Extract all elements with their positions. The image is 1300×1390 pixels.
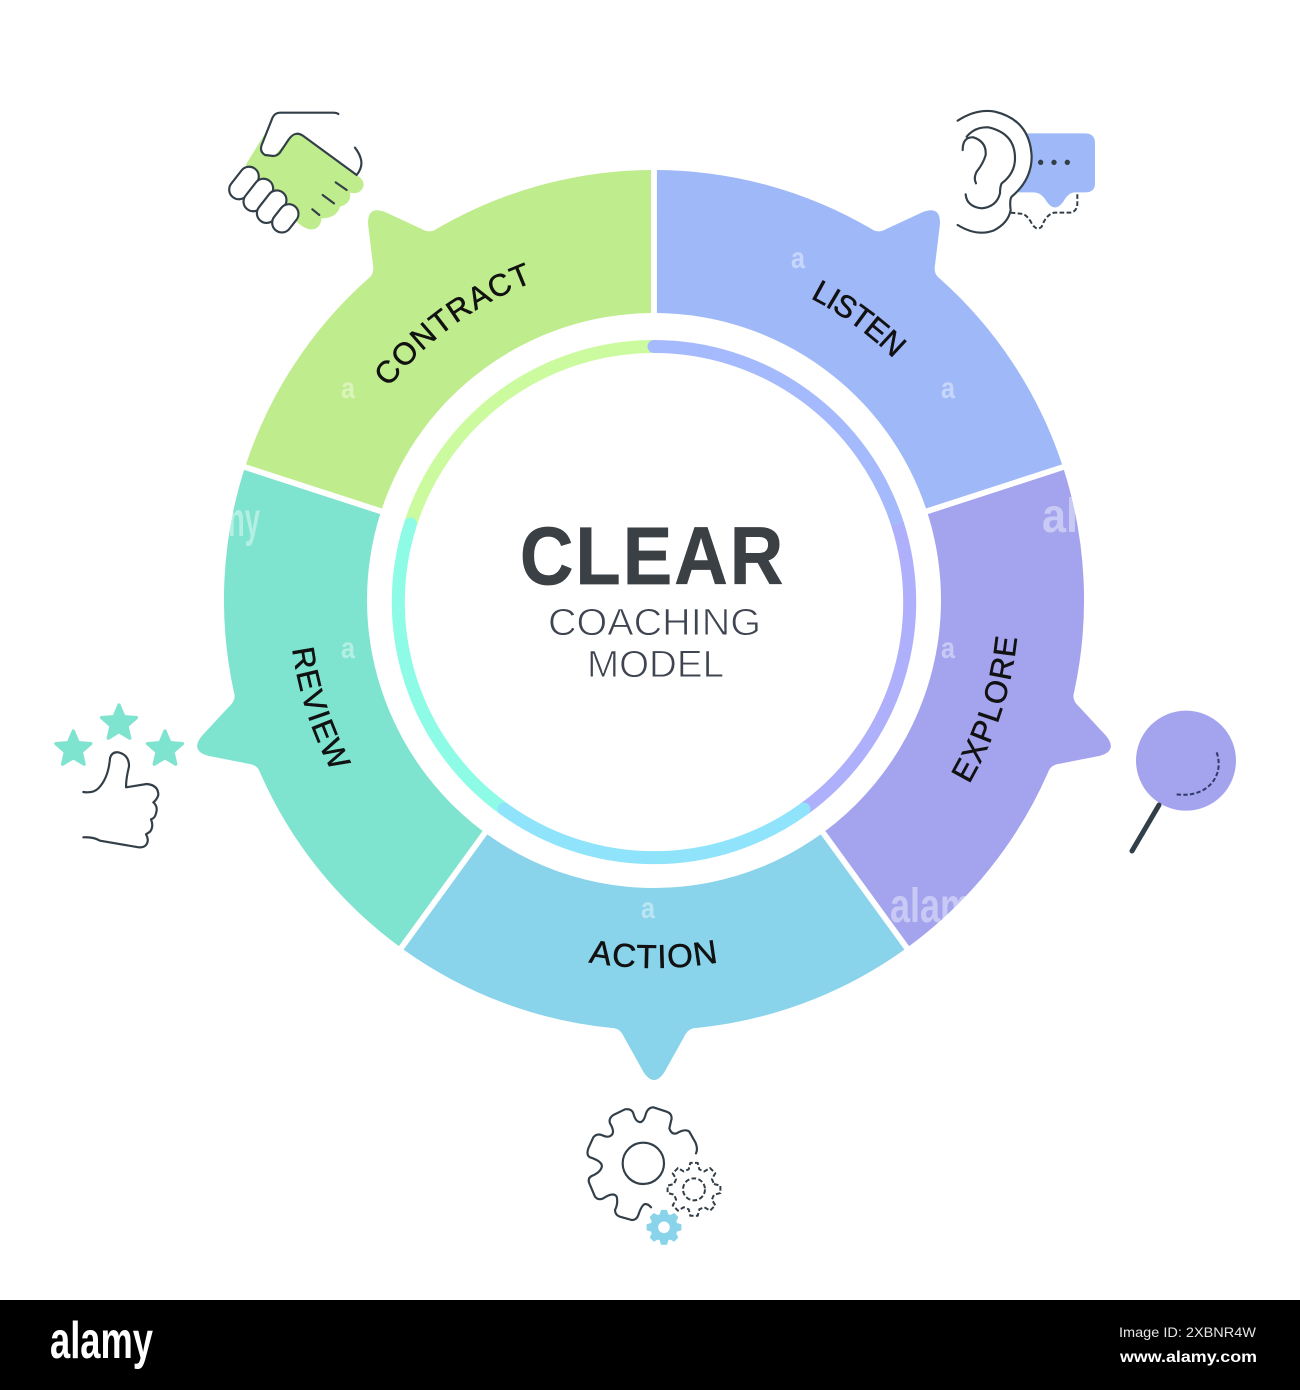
ring arc: explore: [804, 524, 910, 809]
bubble dots: [1038, 160, 1070, 165]
icon: gears: [587, 1107, 720, 1244]
large gear: [587, 1107, 697, 1220]
centre white disc: [368, 316, 940, 888]
icon: thumbs up with stars: [56, 705, 182, 847]
segment: action: [404, 834, 904, 1080]
finger creases: [312, 182, 347, 215]
image id: Image ID: 2XBNR4W: [1119, 1324, 1257, 1340]
fingers: [225, 163, 302, 236]
label: listen: LISTEN: [812, 280, 907, 358]
lens highlight: [1176, 752, 1219, 795]
label: explore: EXPLORE: [951, 636, 1018, 782]
watermark: faint alamy marks: ny: [228, 494, 260, 547]
watermark: faint alamy marks: a: [641, 892, 655, 925]
watermark: faint alamy marks: [228, 242, 1078, 933]
footer logo: alamy: [50, 1312, 153, 1370]
stars: [56, 705, 182, 764]
panel: cycle diagram: [120, 64, 1188, 1080]
footer bar: [0, 1300, 1300, 1390]
handle: [1132, 805, 1159, 851]
dashed gear: [668, 1163, 720, 1216]
icon: magnifying glass: [1132, 711, 1236, 851]
dashed bubble shadow: [1011, 193, 1077, 229]
subtitle: model: MODEL: [587, 644, 724, 686]
watermark: faint alamy marks: a: [941, 632, 955, 665]
watermark: faint alamy marks: a: [941, 372, 955, 405]
watermark: faint alamy marks: a: [791, 242, 805, 275]
label: review: REVIEW: [292, 648, 352, 766]
ear outline: [958, 111, 1032, 233]
icon: handshake: [225, 113, 364, 236]
website: www.alamy.com: [1119, 1349, 1257, 1366]
ear inner lines: [963, 127, 1015, 208]
label: action: ACTION: [588, 940, 716, 968]
segment: listen: [589, 64, 1139, 558]
icon: ear with speech bubble: [958, 111, 1095, 233]
segment: review: [120, 434, 509, 986]
subtitle: coaching: COACHING: [548, 602, 761, 644]
segment: explore: [799, 434, 1188, 986]
ring arc: contract: [410, 346, 654, 524]
large gear hub: [623, 1143, 664, 1184]
watermark: faint alamy marks: al: [1042, 490, 1078, 543]
inner progress ring: [398, 346, 910, 858]
speech bubble: [1013, 133, 1095, 207]
watermark: faint alamy marks: a: [341, 632, 355, 665]
segment: contract: [169, 64, 719, 558]
lens: [1136, 711, 1236, 811]
title: CLEAR: CLEAR: [520, 509, 785, 602]
ring arc: review: [398, 524, 504, 809]
ring arc: listen: [654, 346, 898, 524]
label: contract: CONTRACT: [376, 262, 526, 383]
watermark: faint alamy marks: a: [341, 372, 355, 405]
watermark: faint alamy marks: alam: [890, 880, 972, 933]
thumb outline: [83, 752, 158, 847]
ring arc: action: [504, 809, 804, 858]
hand outline: [261, 113, 361, 175]
green hand: [246, 133, 364, 229]
small blue gear: [648, 1211, 680, 1244]
